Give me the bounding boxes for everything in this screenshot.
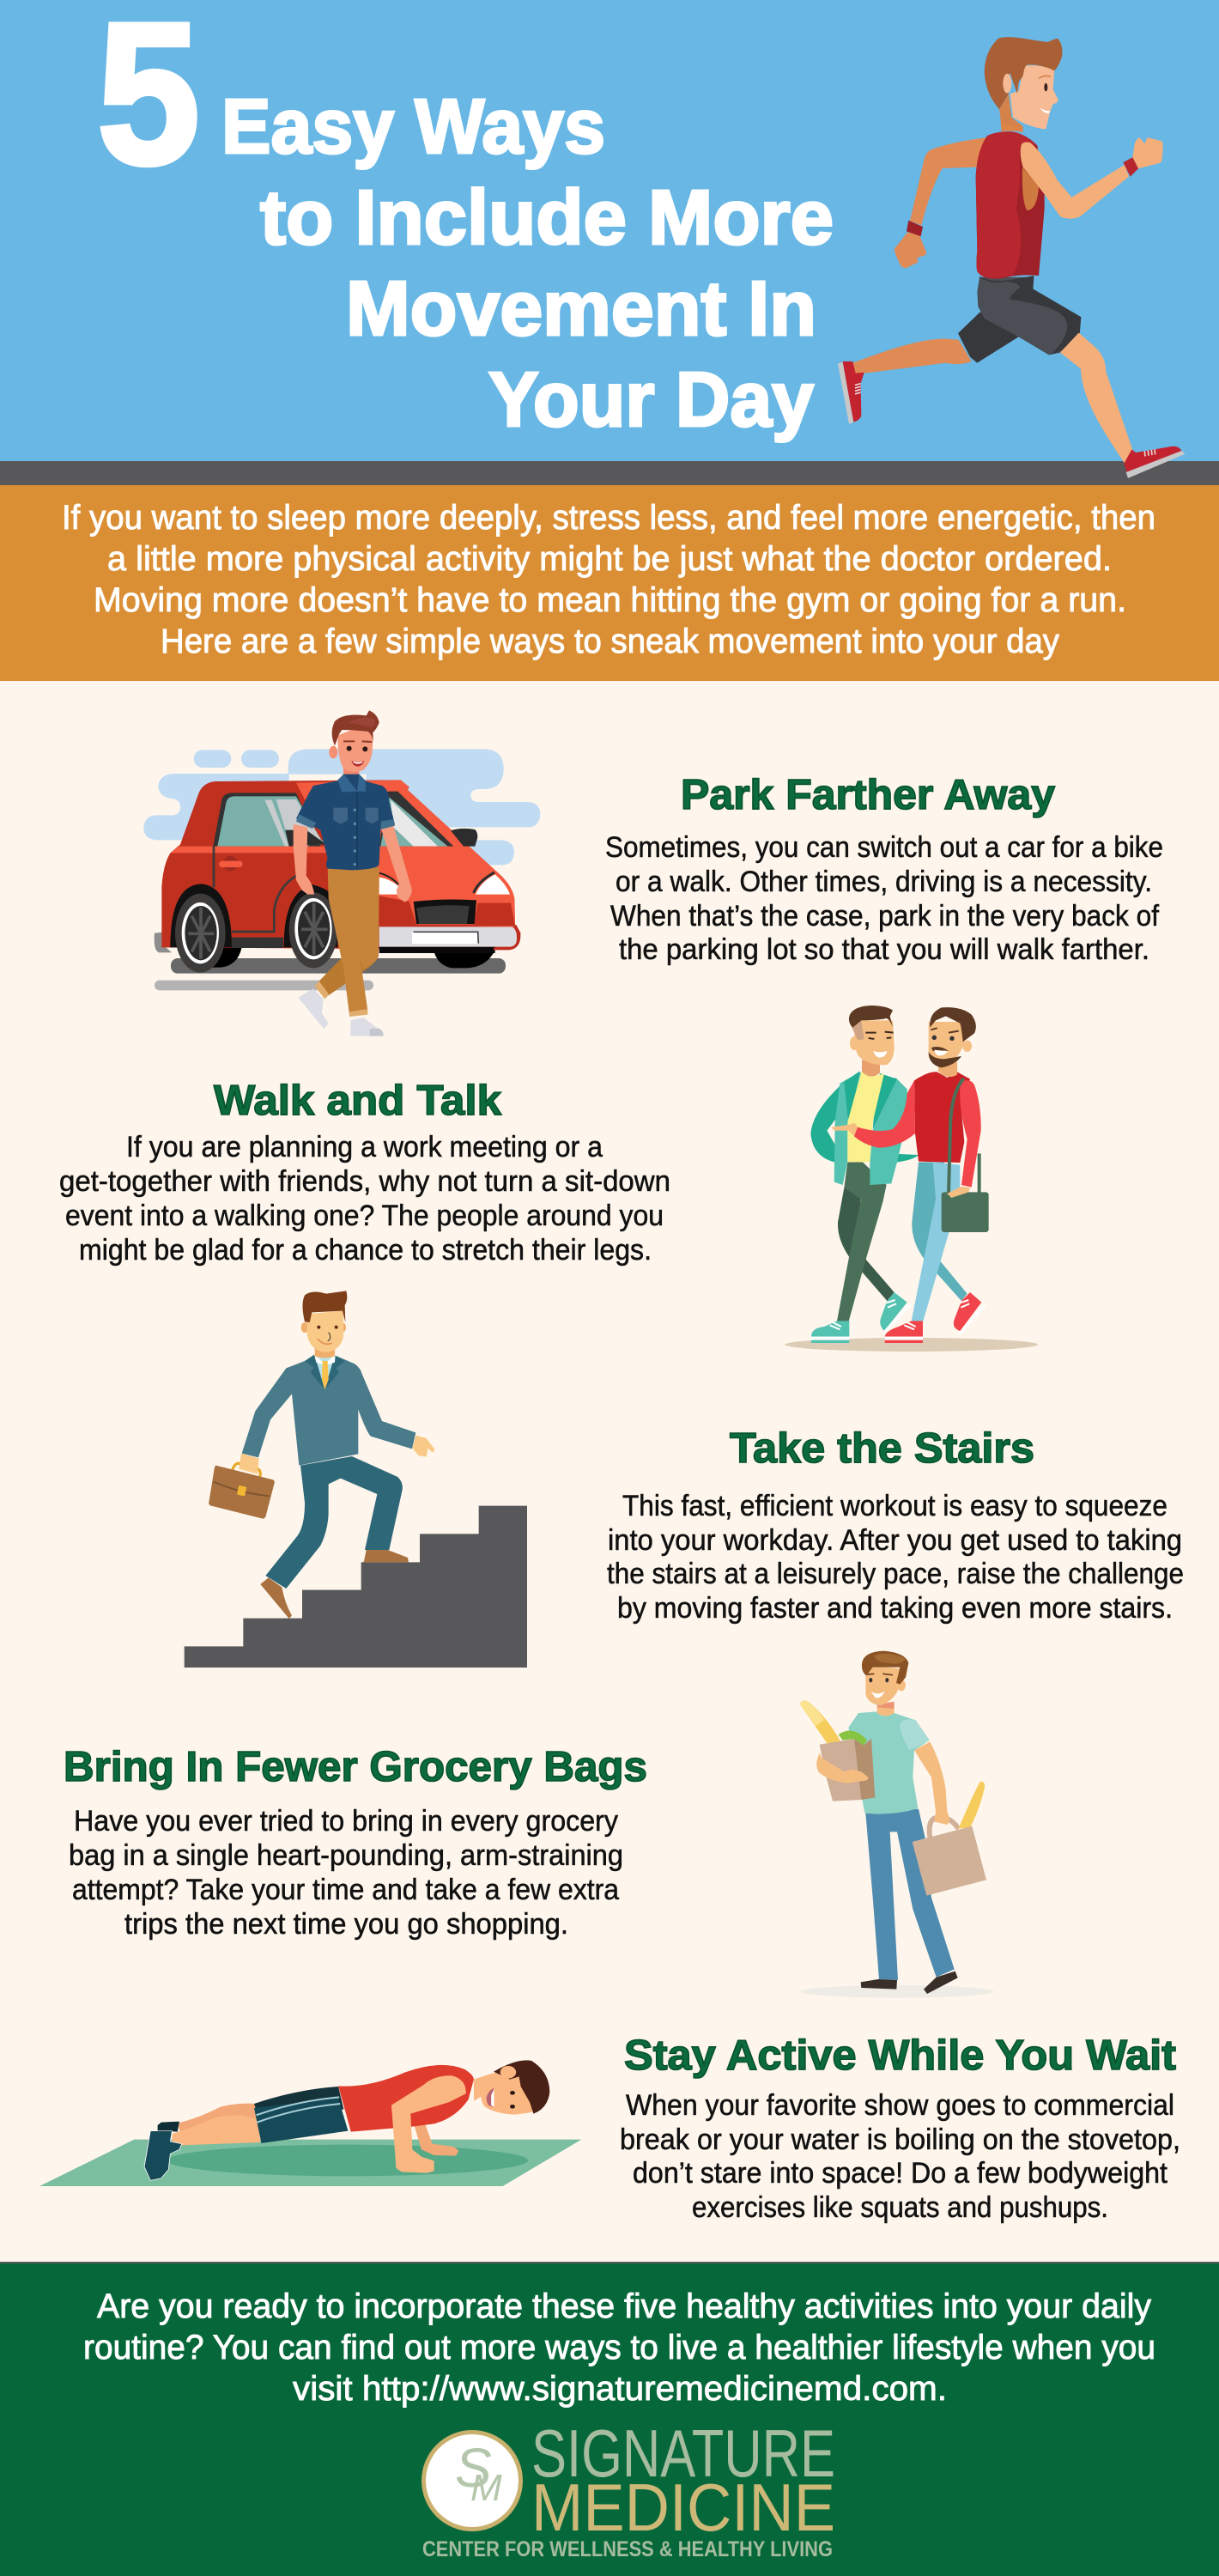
logo: signature medicine — [421, 2415, 835, 2561]
title: Easy Ways — [221, 84, 605, 170]
icon: two men walking — [785, 1005, 1038, 1352]
title: to Include More — [260, 175, 834, 261]
text: park farther away: or a walk. Other times, driving is a necessity. — [616, 866, 1152, 898]
text: grocery bags: Have you ever tried to bring in every grocery — [74, 1805, 618, 1838]
logo emblem: M — [470, 2467, 502, 2509]
panel: walk and talk — [59, 1005, 1038, 1352]
text: walk and talk: event into a walking one? The people around you — [65, 1200, 664, 1232]
icon: runner — [838, 37, 1186, 478]
heading: walk and talk: Walk and Talk — [214, 1078, 502, 1124]
panel: park farther away — [143, 710, 1163, 1036]
text: grocery bags: trips the next time you go shopping. — [124, 1908, 568, 1941]
text: walk and talk — [59, 1131, 670, 1267]
text: stay active: When your favorite show goes to commercial — [626, 2089, 1174, 2122]
title — [97, 0, 834, 443]
icon: businessman climbing stairs — [185, 1291, 527, 1668]
logo: signature medicine: MEDICINE — [531, 2470, 835, 2545]
panel: introduction: If you want to sleep more deeply, stress less, and feel more energetic, then — [62, 499, 1155, 537]
text: take the stairs: into your workday. After you get used to taking — [608, 1524, 1182, 1557]
text: call to action: visit http://www.signaturemedicinemd.com. — [293, 2370, 947, 2408]
text: grocery bags: attempt? Take your time and take a few extra — [72, 1874, 619, 1906]
logo tagline: CENTER FOR WELLNESS & HEALTHY LIVING — [422, 2537, 833, 2561]
title: Movement In — [346, 266, 816, 352]
text: grocery bags — [69, 1805, 623, 1941]
text: walk and talk: might be glad for a chance to stretch their legs. — [79, 1234, 652, 1267]
panel: footer — [0, 2262, 1219, 2576]
text: park farther away: the parking lot so that you will walk farther. — [619, 933, 1149, 966]
text: call to action — [83, 2287, 1155, 2408]
text: walk and talk: If you are planning a work meeting or a — [126, 1131, 603, 1163]
panel: bring in fewer grocery bags — [64, 1651, 993, 1998]
text: call to action: routine? You can find out more ways to live a healthier lifestyle when you — [83, 2329, 1155, 2366]
text: park farther away: Sometimes, you can switch out a car for a bike — [605, 831, 1163, 864]
panel: introduction: Here are a few simple ways to sneak movement into your day — [161, 623, 1059, 660]
title: Your Day — [488, 357, 814, 443]
text: stay active: break or your water is boiling on the stovetop, — [620, 2123, 1180, 2156]
text: take the stairs: the stairs at a leisurely pace, raise the challenge — [607, 1558, 1184, 1590]
panel: introduction — [0, 485, 1219, 681]
icon: man doing pushup on mat — [39, 2060, 581, 2186]
text: call to action: Are you ready to incorporate these five healthy activities into your daily — [97, 2287, 1151, 2325]
text: take the stairs: This fast, efficient workout is easy to squeeze — [622, 1490, 1167, 1522]
heading: park farther away: Park Farther Away — [681, 772, 1055, 818]
heading: stay active while you wait: Stay Active While You Wait — [624, 2032, 1176, 2079]
logo emblem: S — [455, 2437, 492, 2499]
logo wordmark: SIGNATURE — [531, 2415, 835, 2491]
panel: header — [0, 0, 1219, 485]
panel: main cream background — [0, 681, 1219, 2263]
heading: bring in fewer grocery bags: Bring In Fewer Grocery Bags — [64, 1744, 647, 1790]
text: grocery bags: bag in a single heart-pounding, arm-straining — [69, 1839, 623, 1872]
icon: man and red car — [143, 710, 540, 1036]
text: park farther away — [605, 831, 1163, 966]
heading: take the stairs: Take the Stairs — [730, 1425, 1034, 1472]
text: take the stairs: by moving faster and taking even more stairs. — [617, 1592, 1173, 1625]
text: walk and talk: get-together with friends, why not turn a sit-down — [59, 1165, 670, 1198]
panel: introduction: Moving more doesn’t have to mean hitting the gym or going for a run. — [94, 581, 1126, 619]
panel: take the stairs — [185, 1291, 1184, 1668]
text: stay active: don’t stare into space! Do a few bodyweight — [633, 2157, 1168, 2190]
icon: man carrying grocery bags — [800, 1651, 993, 1998]
text: take the stairs — [607, 1490, 1184, 1625]
text: park farther away: When that’s the case, park in the very back of — [610, 900, 1160, 933]
panel: stay active while you wait — [39, 2032, 1180, 2224]
ground band — [0, 461, 1219, 485]
logo emblem — [421, 2430, 523, 2531]
text: stay active: exercises like squats and pushups. — [692, 2191, 1108, 2224]
panel: introduction: a little more physical activity might be just what the doctor ordered. — [107, 540, 1112, 578]
text: stay active — [620, 2089, 1180, 2224]
